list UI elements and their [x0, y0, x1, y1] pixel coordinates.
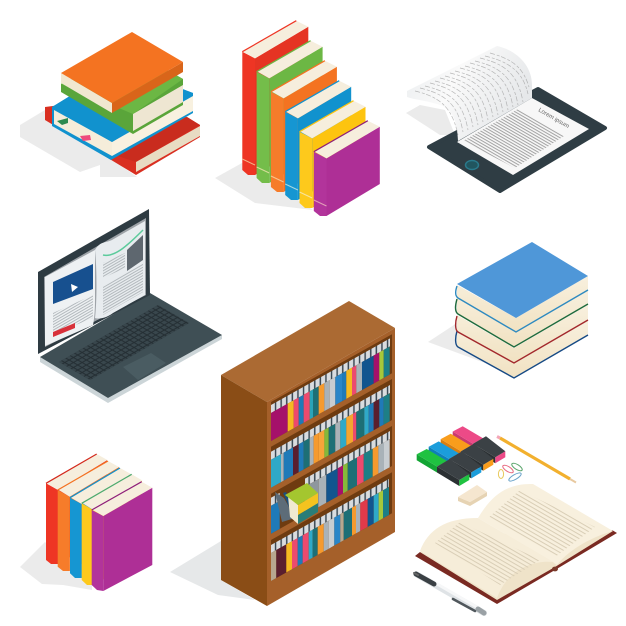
heading on screen: Lorem ipsum — [537, 108, 570, 130]
orange book — [58, 461, 119, 571]
orange marker — [441, 434, 493, 471]
bookmark green — [57, 118, 68, 125]
case side — [221, 375, 267, 606]
navy book — [456, 320, 588, 378]
pencil — [497, 436, 576, 482]
paper clips — [498, 462, 523, 483]
blue book pages — [456, 276, 588, 332]
bookmark pink — [80, 135, 91, 141]
pen — [414, 573, 484, 613]
blue book with bookmarks — [52, 65, 193, 160]
touchpad — [123, 353, 166, 380]
right page — [95, 221, 145, 318]
image block — [127, 235, 143, 271]
open book — [415, 484, 617, 604]
book stack: four books lying flat — [20, 32, 200, 177]
leaning books — [275, 492, 297, 522]
case front — [267, 328, 395, 606]
left page — [420, 518, 553, 598]
purple standing book — [314, 121, 380, 216]
green book — [456, 290, 588, 347]
red book — [46, 454, 107, 564]
yellow standing book — [300, 101, 366, 208]
wooden bookcase — [170, 301, 395, 606]
video block — [53, 264, 93, 304]
shelf 3 — [271, 426, 392, 534]
laptop base — [40, 335, 222, 403]
cover — [415, 530, 617, 604]
closed book stack: four books with blue cover — [428, 242, 588, 378]
keyboard — [59, 305, 189, 380]
orange standing book — [271, 61, 337, 192]
laptop showing digital book — [38, 209, 222, 403]
screen page — [457, 98, 589, 175]
orange top book — [61, 32, 183, 113]
blue marker — [429, 441, 481, 478]
green marker — [417, 449, 469, 486]
red book — [456, 305, 588, 363]
play icon — [71, 284, 78, 292]
device body — [429, 89, 605, 191]
small standing books: five books — [20, 454, 152, 591]
red highlight — [53, 323, 75, 337]
small stack in shelf — [285, 483, 318, 524]
screen — [38, 209, 150, 354]
blue standing book — [285, 81, 351, 200]
right page — [478, 484, 613, 565]
purple book — [92, 482, 152, 591]
case top — [221, 301, 395, 402]
blue book — [70, 468, 131, 578]
green standing book — [257, 41, 323, 183]
red standing book — [242, 21, 308, 175]
shelf 4 — [271, 472, 392, 581]
eraser — [458, 485, 487, 506]
green book — [61, 48, 183, 134]
curled page — [407, 46, 532, 141]
left page — [45, 250, 95, 346]
home button — [466, 160, 478, 170]
shelf 2 — [271, 379, 392, 488]
page block side — [420, 530, 613, 600]
standing books: six books decreasing in height — [215, 21, 380, 216]
yellow book — [82, 474, 142, 585]
shelf 1 — [271, 334, 392, 441]
highlighter markers — [417, 426, 505, 486]
pink marker — [453, 426, 505, 463]
red bottom book — [45, 100, 200, 175]
blue cover — [457, 242, 588, 318]
e-reader with curling page — [406, 46, 605, 191]
